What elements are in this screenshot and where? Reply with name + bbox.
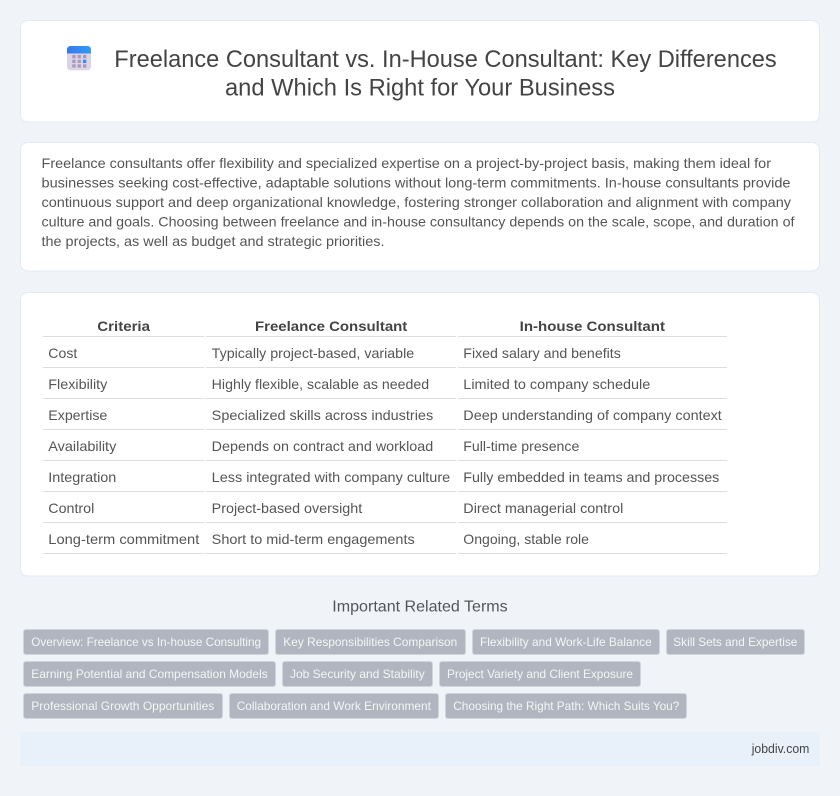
tag: Earning Potential and Compensation Models: [31, 667, 268, 681]
row: expertise: [43, 407, 727, 430]
tag: Professional Growth Opportunities: [31, 699, 214, 713]
row: availability: [43, 438, 727, 460]
table header row: In-house Consultant: [520, 318, 665, 334]
tag: [24, 662, 276, 686]
tag: [282, 662, 432, 686]
row: expertise: Deep understanding of company context: [463, 407, 722, 423]
row: control: Control: [48, 500, 94, 516]
row: expertise: Specialized skills across industries: [212, 407, 433, 423]
row: long-term commitment: Long-term commitment: [48, 531, 199, 547]
panel: intro paragraph: [20, 142, 820, 271]
tag: [666, 630, 804, 654]
row: long-term commitment: Short to mid-term engagements: [212, 531, 415, 547]
intro text block: businesses seeking cost-effective, adaptable solutions without long-term commitments. In-house consultants provide: [42, 174, 791, 190]
intro text block: culture and goals. Choosing between freelance and in-house consultancy depends on the scale, scope, and duration of: [42, 214, 795, 230]
row: integration: Fully embedded in teams and processes: [463, 469, 719, 485]
row: flexibility: [43, 376, 727, 398]
row: flexibility: Limited to company schedule: [463, 376, 651, 392]
footer source text: jobdiv.com: [751, 741, 809, 756]
row: integration: Integration: [48, 469, 116, 485]
row: control: Direct managerial control: [463, 500, 623, 516]
tag: [24, 694, 222, 718]
tag: [230, 694, 438, 718]
tag: [24, 630, 268, 654]
panel: comparison table: [20, 292, 820, 576]
row: long-term commitment: [43, 531, 727, 554]
header panel: [20, 20, 820, 122]
tag: Project Variety and Client Exposure: [447, 667, 633, 681]
related terms heading: Important Related Terms: [332, 598, 508, 616]
tag: [276, 630, 466, 654]
row: long-term commitment: Ongoing, stable role: [463, 531, 589, 547]
tag: Overview: Freelance vs In-house Consulting: [31, 635, 261, 649]
intro text block: [42, 155, 795, 249]
row: availability: Availability: [48, 438, 116, 454]
footer: [20, 732, 820, 766]
title: Freelance Consultant vs. In-House Consultant: Key Differences: [114, 46, 777, 73]
tag: Flexibility and Work-Life Balance: [480, 635, 652, 649]
tag: Collaboration and Work Environment: [237, 699, 432, 713]
row: cost: Cost: [48, 345, 77, 361]
row: cost: Fixed salary and benefits: [463, 345, 621, 361]
title: [114, 46, 777, 102]
row: availability: Full-time presence: [463, 438, 580, 454]
tag: Key Responsibilities Comparison: [283, 635, 457, 649]
row: cost: [43, 345, 727, 368]
row: flexibility: Flexibility: [48, 376, 107, 392]
row: integration: Less integrated with company culture: [212, 469, 450, 485]
row: integration: [43, 469, 727, 492]
row: control: Project-based oversight: [212, 500, 362, 516]
table header row: Freelance Consultant: [255, 318, 408, 334]
title: and Which Is Right for Your Business: [225, 74, 615, 102]
row: availability: Depends on contract and workload: [212, 438, 433, 454]
intro text block: continuous support and deep organizational knowledge, fostering stronger collaboration and alignment with company: [42, 194, 791, 210]
row: control: [43, 500, 727, 522]
row: cost: Typically project-based, variable: [212, 345, 414, 361]
row: flexibility: Highly flexible, scalable as needed: [212, 376, 429, 392]
icon: calendar: [67, 46, 91, 70]
related terms tags: [24, 630, 804, 718]
tag: Skill Sets and Expertise: [673, 635, 798, 649]
table header row: Criteria: [97, 318, 150, 334]
tag: Job Security and Stability: [290, 667, 425, 681]
tag: Choosing the Right Path: Which Suits You?: [453, 699, 680, 713]
tag: [446, 694, 686, 718]
intro text block: the projects, as well as budget and strategic priorities.: [42, 233, 384, 249]
table header row: [43, 318, 727, 336]
tag: [472, 630, 660, 654]
intro text block: Freelance consultants offer flexibility and specialized expertise on a project-by-project basis, making them ideal for: [42, 155, 771, 171]
row: expertise: Expertise: [48, 407, 108, 423]
tag: [440, 662, 640, 686]
